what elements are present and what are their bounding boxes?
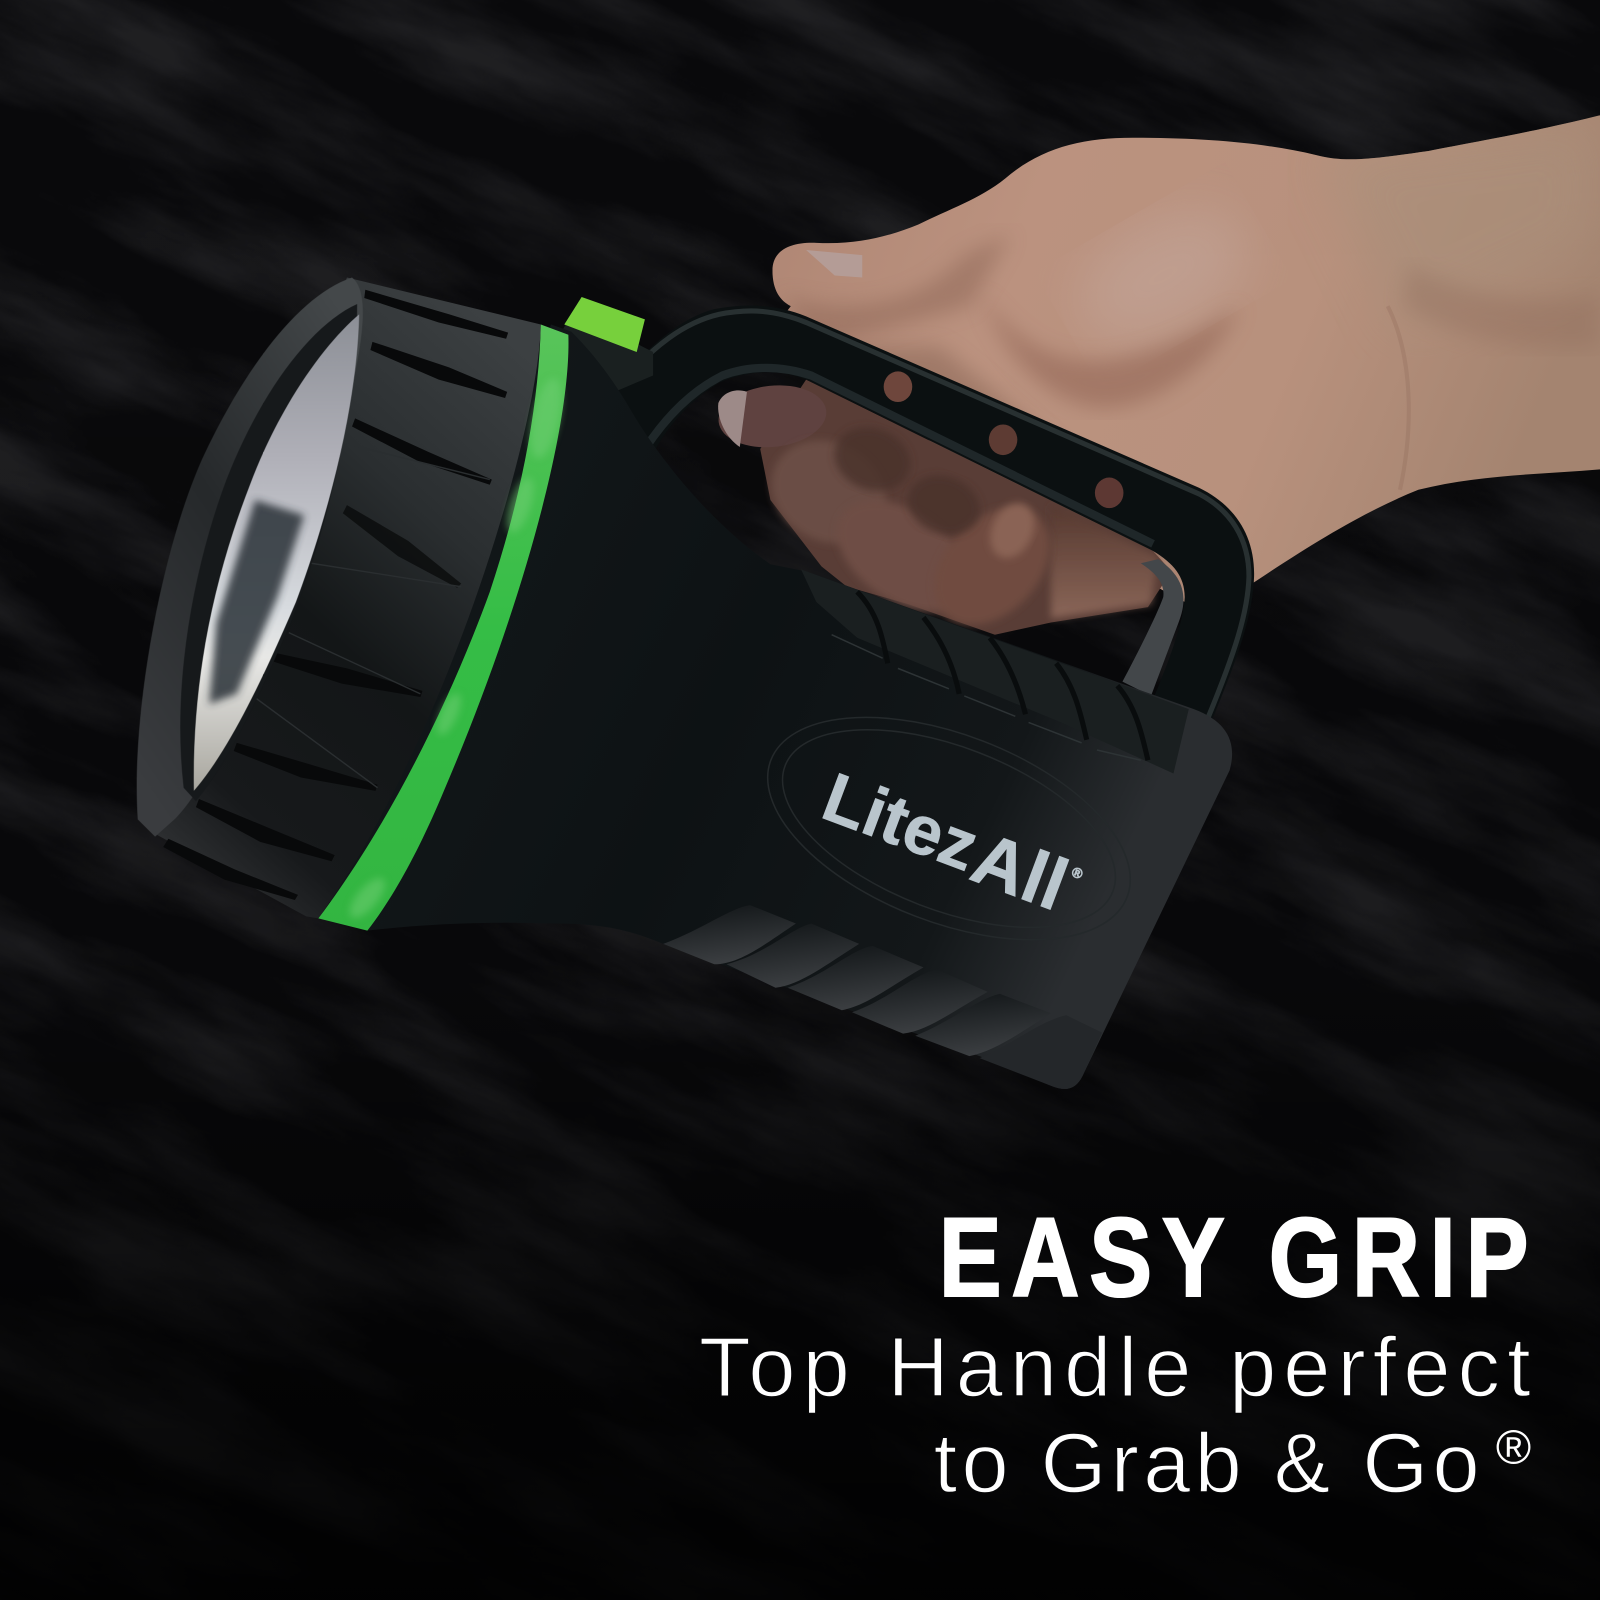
switch base <box>563 311 653 393</box>
heading: EASY GRIP: EASY GRIP <box>939 1194 1528 1320</box>
head thin mould lines <box>250 444 490 788</box>
upper grip ribs <box>801 569 1189 773</box>
logo: LitezAll: All <box>962 816 1079 926</box>
subheading line 2: to Grab & Go <box>934 1415 1480 1510</box>
fingers wrapped around the handle <box>715 380 1171 647</box>
subheading line 2: ® <box>1496 1421 1531 1474</box>
logo oval recess <box>737 673 1161 985</box>
subheading line 1: Top Handle perfect <box>699 1319 1531 1414</box>
handle <box>612 306 1254 719</box>
green slide switch <box>564 297 645 352</box>
ring light patches <box>344 376 567 923</box>
head grip slots <box>163 290 508 900</box>
flashlight <box>137 278 1254 1089</box>
handle top edge highlight <box>624 311 1249 717</box>
handle inner grey wall <box>1122 559 1183 696</box>
hand holding the handle <box>715 102 1600 647</box>
glass lens <box>194 314 359 791</box>
handle inner rim <box>645 368 1153 544</box>
finger holes in handle <box>884 371 1123 508</box>
hand: back of hand and wrist <box>772 115 1600 602</box>
logo: LitezAll: Litez <box>813 757 989 886</box>
logo: LitezAll <box>811 757 1092 931</box>
green ring band <box>318 324 568 931</box>
lower grip ribs <box>663 905 1102 1089</box>
lamp body <box>327 324 1232 1089</box>
inner bezel recess <box>180 304 357 801</box>
head shell <box>151 278 541 918</box>
logo: LitezAll: ® <box>1069 865 1085 883</box>
front bezel <box>137 278 363 837</box>
